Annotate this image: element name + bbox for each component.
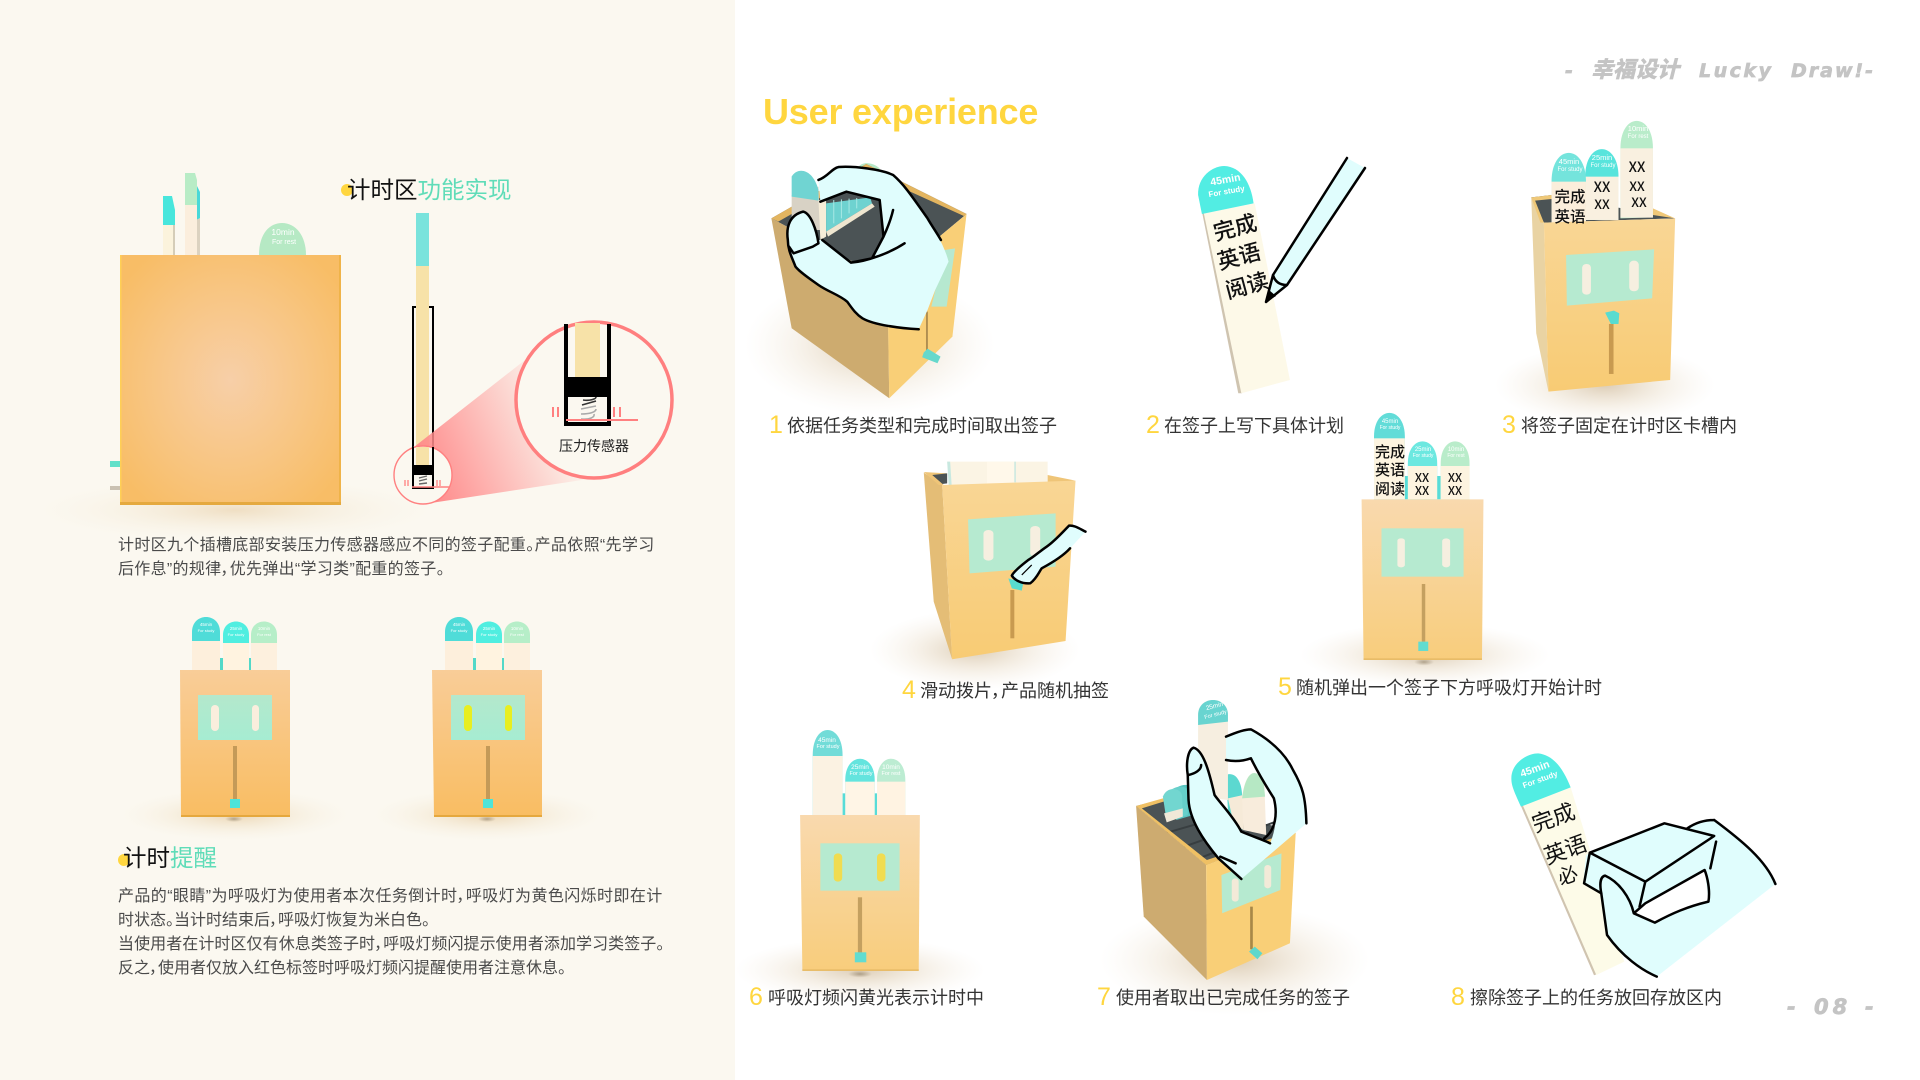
step 5 illustration: stick pops up: For study [1413,453,1434,459]
step 5 illustration: stick pops up: 完成 [1375,441,1405,462]
caption 7 [1097,983,1350,1011]
caption 2: 2 [1146,411,1160,439]
section diagram: stick in slot [413,213,433,488]
step 3 illustration: sticks in slots [1495,121,1715,425]
heading: timer reminder: 计时提醒 [123,845,217,871]
heading: user experience: User experience [763,91,1038,132]
magnifier cone [414,360,650,503]
step 8 illustration: erasing the stick: 完成 [1527,794,1579,839]
step 1 illustration: taking out a stick [745,163,995,415]
step 7 illustration: taking out finished stick [1100,700,1370,1015]
step 3 illustration: sticks in slots: For rest [1628,134,1649,140]
step 3 illustration: sticks in slots: XX [1629,176,1645,195]
step 8 illustration: erasing the stick: 英语 [1539,826,1591,871]
header tag: - [1565,60,1573,82]
caption 5: 随机弹出一个签子下方呼吸灯开始计时 [1296,678,1602,698]
caption 3 [1502,411,1737,439]
step 2 illustration: writing on stick [1198,158,1365,393]
paragraph: timer reminder [118,887,664,977]
caption 1 [769,411,1057,439]
step 8 illustration: erasing the stick: 必 [1553,857,1581,891]
caption 4: 4 [902,676,916,704]
step 5 illustration: stick pops up: 10min [1448,447,1464,453]
step 5 illustration: stick pops up [1300,413,1550,687]
page number [1787,995,1874,1019]
caption 3: 3 [1502,411,1516,439]
small product: white lights [120,617,350,841]
magnified circle: pressure sensor [516,322,672,478]
product front view with sticks: 10min [271,227,295,237]
step 7 illustration: taking out finished stick: For study [1204,709,1228,721]
step 3 illustration: sticks in slots: XX [1631,192,1647,211]
caption 5 [1278,673,1602,701]
step 3 illustration: sticks in slots: For study [1590,163,1616,169]
paragraph: timer reminder: 当使用者在计时区仅有休息类签子时，呼吸灯频闪提示使用者添加学习类签子。 [118,936,664,953]
step 5 illustration: stick pops up: 25min [1415,447,1431,453]
caption 4 [902,676,1109,704]
small product: white lights: 25min [230,626,243,631]
small product: yellow lights [372,617,602,841]
paragraph: function implementation: 后作息”的规律，优先弹出“学习类”配重的签子。 [118,561,445,578]
small detail circle [394,446,452,504]
step 2 illustration: writing on stick: For study [1208,184,1246,199]
step 3 illustration: sticks in slots: XX [1594,194,1610,213]
step 6 illustration: yellow blinking lights: 10min [882,764,900,771]
step 8 illustration: erasing the stick: For study [1521,769,1559,790]
title dot: function [341,184,353,196]
caption 6 [749,983,984,1011]
small product: white lights: For rest [257,632,272,637]
paragraph: function implementation: 计时区九个插槽底部安装压力传感器感应不同的签子配重。产品依照“先学习 [118,537,655,554]
caption 2 [1146,411,1344,439]
step 5 illustration: stick pops up: XX [1415,482,1429,499]
caption 8: 擦除签子上的任务放回存放区内 [1470,988,1722,1008]
step 5 illustration: stick pops up: 阅读 [1375,478,1405,499]
step 5 illustration: stick pops up: 英语 [1375,459,1405,480]
small product: yellow lights: For study [481,632,497,637]
paragraph: timer reminder: 产品的“眼睛”为呼吸灯为使用者本次任务倒计时，呼吸灯为黄色闪烁时即在计 [118,888,663,905]
step 4 illustration: sliding the switch [870,462,1085,690]
title dot: reminder [118,854,130,866]
caption 8 [1451,983,1722,1011]
step 6 illustration: yellow blinking lights: For study [850,771,873,777]
caption 1: 依据任务类型和完成时间取出签子 [787,416,1057,436]
step 2 illustration: writing on stick: 阅读 [1221,263,1272,305]
header tag: 幸福设计 [1591,58,1679,83]
small product: yellow lights: 10min [511,626,524,631]
step 8 illustration: erasing the stick [1511,753,1775,977]
small product: yellow lights: For rest [510,632,525,637]
caption 2: 在签子上写下具体计划 [1164,416,1344,436]
step 5 illustration: stick pops up: XX [1448,482,1462,499]
caption 4: 滑动拨片，产品随机抽签 [920,681,1109,701]
heading: function implementation: 计时区功能实现 [347,177,512,203]
step 8 illustration: erasing the stick: 45min [1519,758,1551,780]
paragraph: timer reminder: 时状态。当计时结束后，呼吸灯恢复为米白色。 [118,912,430,929]
small product: yellow lights: For study [451,628,467,633]
header tag [1565,58,1875,83]
small product: yellow lights: 25min [483,626,496,631]
small product: white lights: For study [198,628,214,633]
step 3 illustration: sticks in slots: 英语 [1554,205,1586,227]
paragraph: timer reminder: 反之，使用者仅放入红色标签时呼吸灯频闪提醒使用者注意休息。 [118,960,566,977]
step 5 illustration: stick pops up: 45min [1382,419,1398,425]
small product: yellow lights: 45min [453,622,466,627]
step 3 illustration: sticks in slots: XX [1629,157,1646,177]
step 6 illustration: yellow blinking lights [735,730,985,1002]
step 6 illustration: yellow blinking lights: 25min [851,764,869,771]
step 6 illustration: yellow blinking lights: For study [817,744,840,750]
step 3 illustration: sticks in slots: For study [1557,167,1583,173]
step 2 illustration: writing on stick: 完成 [1209,205,1260,247]
header tag: Draw!- [1791,60,1875,82]
step 6 illustration: yellow blinking lights: For rest [882,771,901,777]
sensor label: 压力传感器 [559,438,629,454]
caption 7: 7 [1097,983,1111,1011]
step 5 illustration: stick pops up: For study [1380,425,1401,431]
step 2 illustration: writing on stick: 英语 [1213,234,1264,276]
step 7 illustration: taking out finished stick: 25min [1205,701,1224,712]
caption 6: 呼吸灯频闪黄光表示计时中 [768,988,984,1008]
step 3 illustration: sticks in slots: 完成 [1554,185,1586,207]
caption 7: 使用者取出已完成任务的签子 [1116,988,1350,1008]
product front view with sticks [35,173,435,542]
step 3 illustration: sticks in slots: 25min [1592,153,1612,162]
step 3 illustration: sticks in slots: 10min [1628,124,1648,133]
caption 6: 6 [749,983,763,1011]
step 3 illustration: sticks in slots: XX [1594,177,1611,197]
step 5 illustration: stick pops up: XX [1415,469,1429,486]
caption 8: 8 [1451,983,1465,1011]
step 3 illustration: sticks in slots: 45min [1559,157,1579,166]
product front view with sticks: For rest [272,239,296,246]
step 6 illustration: yellow blinking lights: 45min [818,737,836,744]
header tag: Lucky [1699,60,1773,82]
small product: white lights: 45min [200,622,213,627]
step 5 illustration: stick pops up: For rest [1447,453,1465,459]
caption 1: 1 [769,411,783,439]
step 5 illustration: stick pops up: XX [1448,469,1462,486]
small product: white lights: For study [228,632,244,637]
page number: - [1865,995,1874,1019]
caption 5: 5 [1278,673,1292,701]
step 2 illustration: writing on stick: 45min [1209,172,1241,189]
paragraph: function implementation [118,536,655,578]
caption 3: 将签子固定在计时区卡槽内 [1521,416,1737,436]
small product: white lights: 10min [258,626,271,631]
panel: left background [0,0,735,1080]
page number: 08 [1814,995,1851,1019]
page number: - [1787,995,1796,1019]
